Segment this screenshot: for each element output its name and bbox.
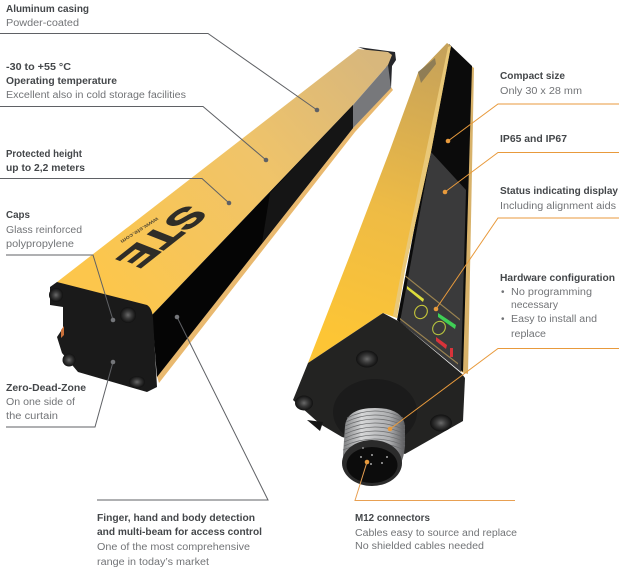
callout: zero-dead-zone: On one side of <box>6 397 75 408</box>
callout: compact size: Compact size <box>500 71 565 82</box>
callout: M12 connectors: Cables easy to source and replace <box>355 528 517 539</box>
callout: zero-dead-zone: the curtain <box>6 411 58 422</box>
callout: IP65 and IP67: IP65 and IP67 <box>500 134 567 145</box>
callout: operating temperature: -30 to +55 °C <box>6 62 71 73</box>
callout: caps <box>6 210 115 322</box>
callout: caps: polypropylene <box>6 239 74 250</box>
screws on bottom cap <box>356 350 378 368</box>
M12 threaded connector <box>342 408 405 486</box>
callout: status indicating display: Status indicating display <box>500 186 618 197</box>
callout: finger, hand and body detection <box>97 315 268 567</box>
callout: caps: Glass reinforced <box>6 225 82 236</box>
callout: hardware configuration: Easy to install and <box>511 314 597 325</box>
yellow indicator <box>407 286 424 302</box>
callout: operating temperature: Operating temperature <box>6 76 117 87</box>
callout: protected height: Protected height <box>6 149 83 160</box>
yellow top face <box>57 49 392 315</box>
right light curtain bar <box>293 43 474 486</box>
yellow face <box>308 43 451 363</box>
callout: hardware configuration: Hardware configuration <box>500 273 615 284</box>
red indicator <box>436 337 447 349</box>
STE logo: STE <box>107 201 217 272</box>
cap mounting flange <box>333 379 417 445</box>
callout: M12 connectors <box>355 460 517 552</box>
callout: compact size: Only 30 x 28 mm <box>500 86 582 97</box>
callout: protected height <box>0 149 231 205</box>
callout: hardware configuration: • <box>501 287 505 298</box>
green indicator <box>438 313 456 329</box>
far end cap outline <box>358 47 396 88</box>
callout: operating temperature <box>0 62 268 162</box>
callout: hardware configuration <box>388 273 619 431</box>
callout: finger, hand and body detection: and multi-beam for access control <box>97 527 262 538</box>
yellow lower strip <box>157 87 393 383</box>
callout: caps: Caps <box>6 210 30 221</box>
callout: hardware configuration: No programming <box>511 287 592 298</box>
callout: zero-dead-zone <box>6 360 115 427</box>
grey reflection panel <box>400 152 466 372</box>
grey reflection <box>353 65 391 128</box>
callout: hardware configuration: replace <box>511 329 546 340</box>
callout: hardware configuration: • <box>501 314 505 325</box>
callout: hardware configuration: necessary <box>511 300 558 311</box>
callout: aluminum casing <box>0 4 319 112</box>
callout: protected height: up to 2,2 meters <box>6 163 85 174</box>
logo on far end <box>418 58 436 83</box>
callout: aluminum casing: Aluminum casing <box>6 4 89 15</box>
black front window <box>152 105 353 377</box>
callout: aluminum casing: Powder-coated <box>6 18 79 29</box>
callout: zero-dead-zone: Zero-Dead-Zone <box>6 383 86 394</box>
callout: compact size <box>446 71 619 143</box>
callout: finger, hand and body detection: Finger, hand and body detection <box>97 513 255 524</box>
screws on near cap <box>49 288 63 302</box>
black window <box>397 44 472 372</box>
callout: M12 connectors: M12 connectors <box>355 513 430 524</box>
callout: status indicating display <box>434 186 619 311</box>
thin right edge strip <box>461 65 474 374</box>
callout: finger, hand and body detection: One of the most comprehensive <box>97 542 250 553</box>
callout: M12 connectors: No shielded cables needed <box>355 541 484 552</box>
left light curtain bar <box>49 47 396 392</box>
callout: status indicating display: Including alignment aids <box>500 201 616 212</box>
small web address: www.ste.com <box>119 215 160 244</box>
callout: operating temperature: Excellent also in cold storage facilities <box>6 90 186 101</box>
callout: IP65 and IP67 <box>443 134 619 194</box>
status display <box>400 275 460 364</box>
bottom cap <box>293 313 465 454</box>
near end cap <box>50 282 157 392</box>
